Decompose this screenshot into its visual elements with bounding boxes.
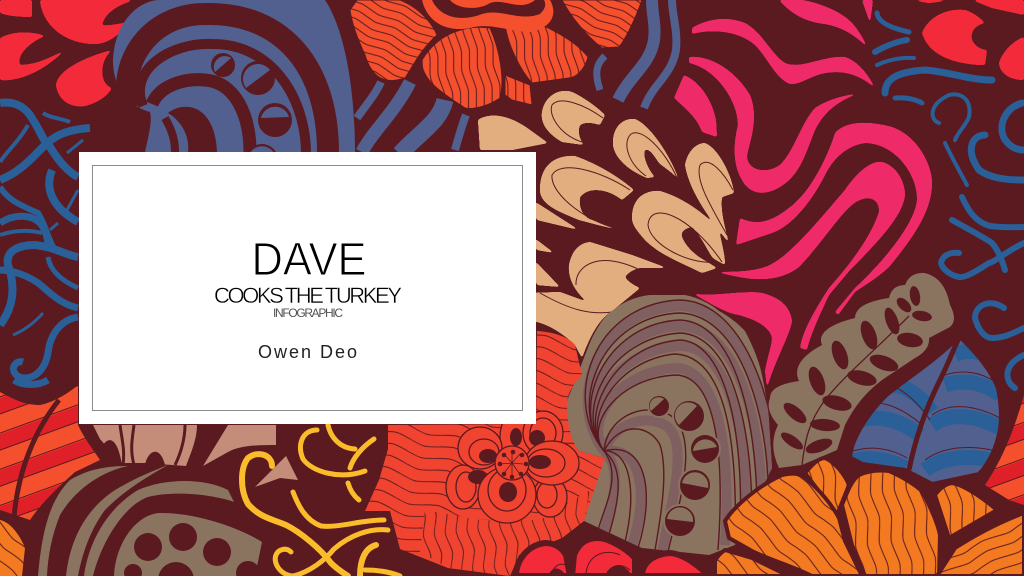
icon: orange petal corner xyxy=(0,520,25,576)
pattern: taupe fern leaf xyxy=(769,273,954,468)
pattern: red leaf right edge xyxy=(985,395,1024,505)
icon: blue disc bottom left xyxy=(14,380,48,384)
subtitle: COOKS THE TURKEY xyxy=(214,283,402,308)
icon: shell dots xyxy=(124,523,260,576)
pattern: red petals bottom centre xyxy=(516,538,709,576)
pattern: blue veined leaf xyxy=(849,335,1002,485)
icon: half-filled swirl dots xyxy=(211,53,292,176)
pattern: red flower bottom centre xyxy=(365,331,605,576)
pattern: red petals top left xyxy=(0,0,135,106)
title: DAVE xyxy=(252,233,366,285)
caption: INFOGRAPHIC xyxy=(273,306,343,320)
pattern: red leaf bottom left xyxy=(0,385,100,576)
pattern: yellow scrolls xyxy=(242,425,400,576)
pattern: orange flower bottom right xyxy=(715,458,1024,576)
pattern: orange-red flower top centre xyxy=(350,0,642,108)
pattern: peach petals xyxy=(478,91,734,358)
icon: seven-petal flower xyxy=(446,411,579,523)
pattern: brown swirl shell xyxy=(567,295,772,555)
title card xyxy=(79,152,536,424)
icon: half-filled shell dots xyxy=(647,394,721,538)
icon: flower heart xyxy=(422,0,553,32)
pattern: blue squiggles left xyxy=(0,102,90,385)
pattern: pink ribbons xyxy=(674,0,932,388)
pattern: slate blue swirl top left xyxy=(113,0,355,176)
pattern: slate stripes beside swirl xyxy=(357,0,676,154)
author: Owen Deo xyxy=(258,342,357,362)
pattern: blue squiggles right xyxy=(875,13,1024,388)
pattern: taupe shell bottom left xyxy=(38,465,262,576)
pattern: red petals top right xyxy=(909,0,1024,80)
pattern: dusty pink leaves xyxy=(93,425,298,487)
